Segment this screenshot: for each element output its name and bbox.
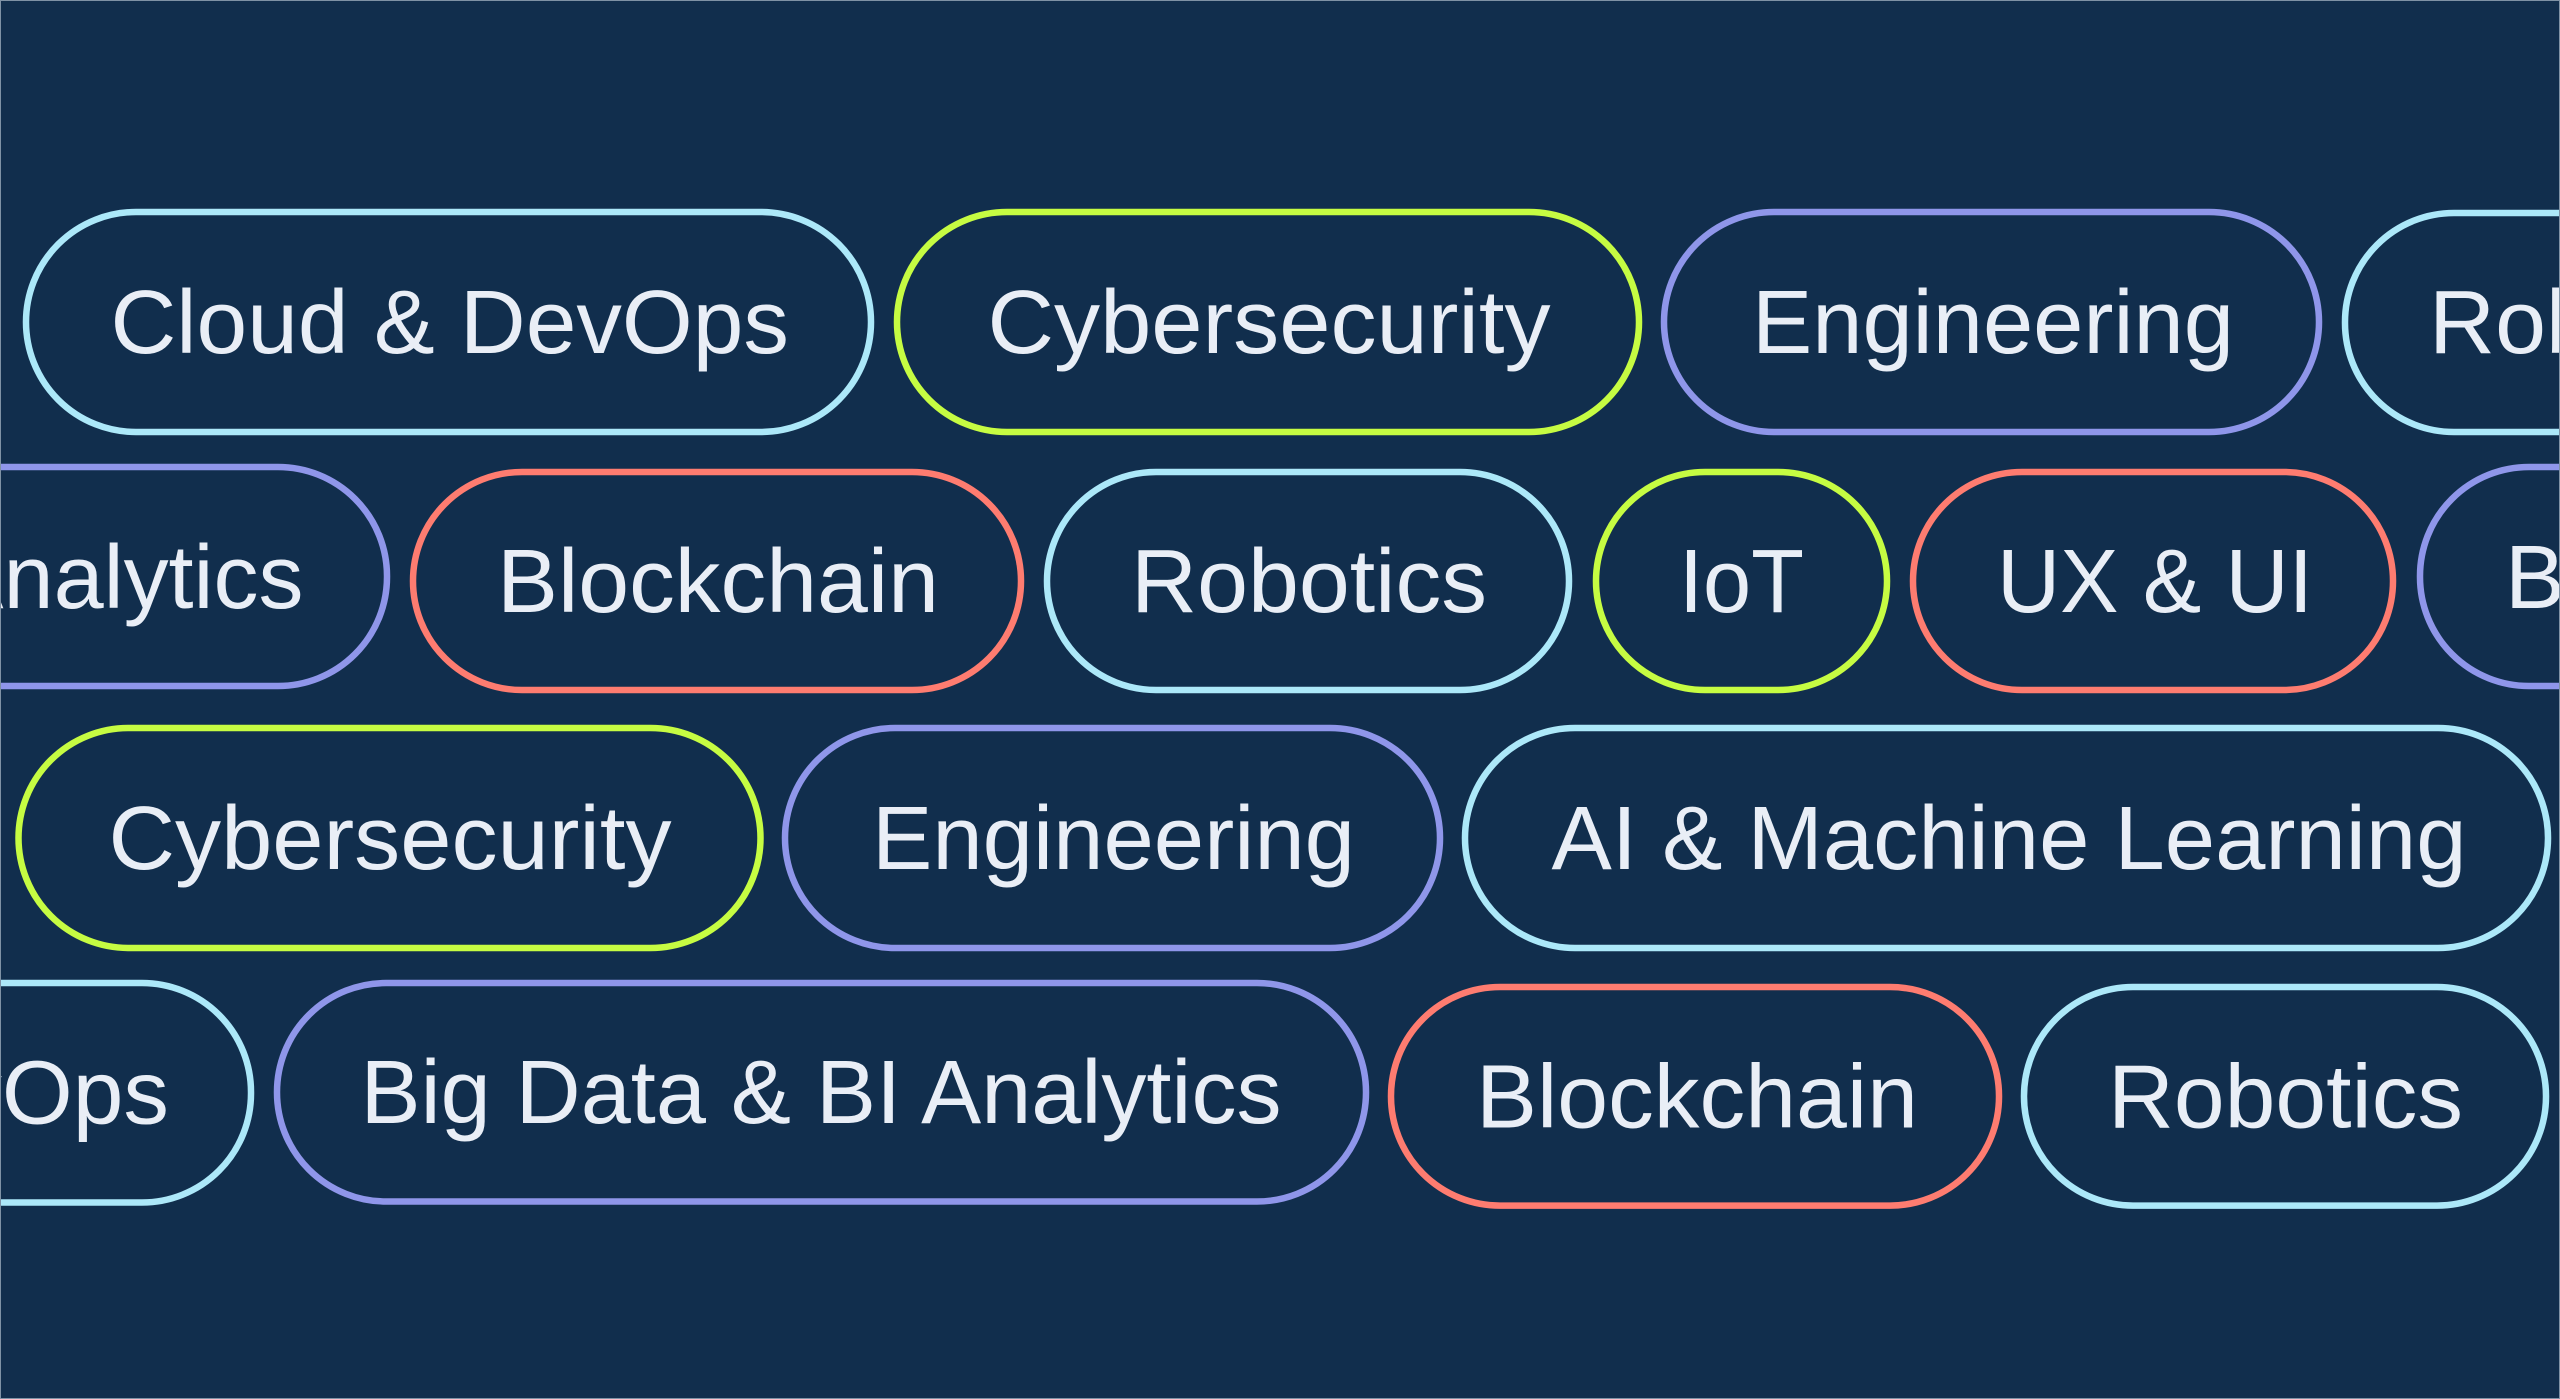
- pill: AI & Machine Learning: AI & Machine Learning: [1552, 789, 2466, 889]
- pill: Blockchain (row 2): Blockchain: [497, 532, 939, 632]
- pill: Cybersecurity (row 3): Cybersecurity: [108, 789, 672, 889]
- pill: UX & UI: UX & UI: [1997, 532, 2313, 632]
- pill: Blockchain (row 4): [1391, 987, 1999, 1206]
- pill: Big Data & BI Analytics (clipped at left): [0, 467, 387, 686]
- pill: Cybersecurity (row 1): [897, 212, 1639, 432]
- pill: Big Data & BI Analytics (clipped at right): [2420, 467, 2560, 686]
- pill: Robotics (row 4): Robotics: [2108, 1048, 2463, 1148]
- pill: Cloud & DevOps: [26, 212, 871, 432]
- pill: Cybersecurity (row 3): [18, 728, 760, 948]
- pill: Cloud & DevOps (clipped at left): [0, 983, 251, 1202]
- pill: Robotics (row 2): [1047, 472, 1569, 690]
- pill: IoT: [1596, 472, 1887, 690]
- pill: Big Data & BI Analytics (row 4): Big Data & BI Analytics: [360, 1043, 1282, 1143]
- pill: Engineering (row 3): [785, 728, 1440, 948]
- pill: Engineering (row 1): [1664, 212, 2319, 432]
- pill: Robotics (row 4): [2024, 987, 2546, 1206]
- pill: Big Data & BI Analytics (row 4): [277, 983, 1366, 1202]
- pill: Robotics (clipped at right): [2345, 213, 2560, 432]
- pill: Engineering (row 1): Engineering: [1752, 273, 2234, 373]
- pill: Cloud & DevOps: Cloud & DevOps: [110, 273, 789, 373]
- pill: Cybersecurity (row 1): Cybersecurity: [988, 273, 1550, 373]
- pill: UX & UI: [1913, 472, 2393, 690]
- pill: Blockchain (row 4): Blockchain: [1476, 1048, 1918, 1148]
- pill: AI & Machine Learning: [1465, 728, 2548, 948]
- pill: Robotics (row 2): Robotics: [1131, 532, 1487, 632]
- pill: Blockchain (row 2): [413, 472, 1021, 690]
- pill: IoT: IoT: [1679, 532, 1804, 632]
- pill: Engineering (row 3): Engineering: [872, 789, 1355, 889]
